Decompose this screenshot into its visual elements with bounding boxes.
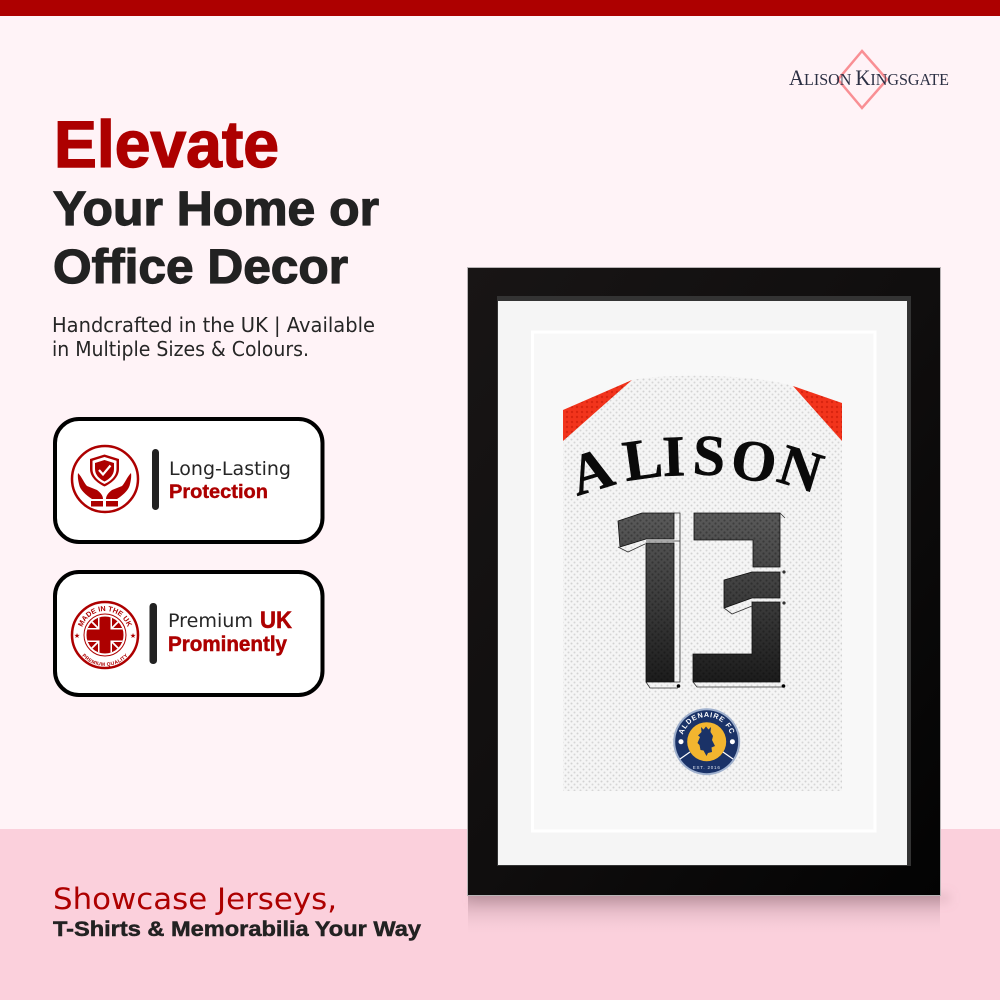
digit 3 (693, 513, 780, 682)
divider bar (152, 449, 159, 510)
heading word: Elevate: Elevate (54, 107, 279, 181)
inner mat window (532, 332, 875, 831)
subheading text (52, 313, 375, 361)
icon: made in the UK badge: MADE IN THE UK (78, 606, 132, 627)
digit 1 (618, 513, 674, 682)
icon: made in the UK badge: ★ (74, 632, 80, 640)
feature card: Premium UK Prominently (53, 570, 324, 697)
logo wordmark: ALISON KINGSGATE (789, 65, 949, 90)
card label: Premium (168, 610, 253, 632)
white mat board (498, 301, 907, 865)
heading: Elevate Your Home or Office Decor (53, 107, 379, 294)
icon: made in the UK badge: PREMIUM QUALITY (82, 654, 127, 666)
card label: Protection (169, 481, 268, 503)
heading line: Office Decor: Office Decor (53, 241, 348, 294)
caption: Showcase Jerseys, T-Shirts & Memorabilia Your Way (53, 882, 421, 941)
feature card: Long-Lasting Protection (55, 419, 322, 542)
icon: made in the UK badge: ★ (130, 632, 136, 640)
top red bar (0, 0, 1000, 16)
card label: Long-Lasting (169, 458, 291, 480)
card label: Prominently (168, 633, 287, 656)
club crest: Aldenaire FC: EST. 2016 (693, 765, 721, 770)
card label (169, 458, 291, 503)
card label: UK (260, 607, 293, 634)
black frame (467, 267, 941, 896)
digit 1 highlights (618, 513, 680, 688)
picture frame with jersey (467, 267, 941, 896)
icon: made in the UK badge (70, 600, 140, 670)
icon: shield held by hands (72, 446, 138, 512)
right red sleeve trim (793, 386, 842, 441)
player name: ALISON (562, 422, 830, 508)
divider bar (150, 603, 157, 664)
caption: Showcase Jerseys, T-Shirts & Memorabilia Your Way: T-Shirts & Memorabilia Your Way (53, 917, 421, 941)
bottom pink floor band (0, 829, 1000, 1000)
club crest: Aldenaire FC (673, 708, 740, 776)
subheading text: in Multiple Sizes & Colours. (52, 337, 309, 361)
heading line: Your Home or: Your Home or (53, 183, 379, 236)
logo diamond (838, 51, 887, 108)
caption: Showcase Jerseys, T-Shirts & Memorabilia Your Way: Showcase Jerseys, (53, 882, 337, 916)
digit 3 highlights (693, 513, 785, 687)
left red sleeve trim (563, 380, 632, 441)
brand logo (789, 51, 949, 108)
subheading text: Handcrafted in the UK | Available (52, 313, 375, 337)
club crest: Aldenaire FC: ALDENAIRE FC (679, 712, 734, 735)
frame reflection shadow (468, 893, 950, 937)
player number 13 (618, 513, 786, 688)
crest lion head (698, 726, 715, 756)
jersey back (562, 376, 842, 791)
card label (168, 607, 293, 656)
